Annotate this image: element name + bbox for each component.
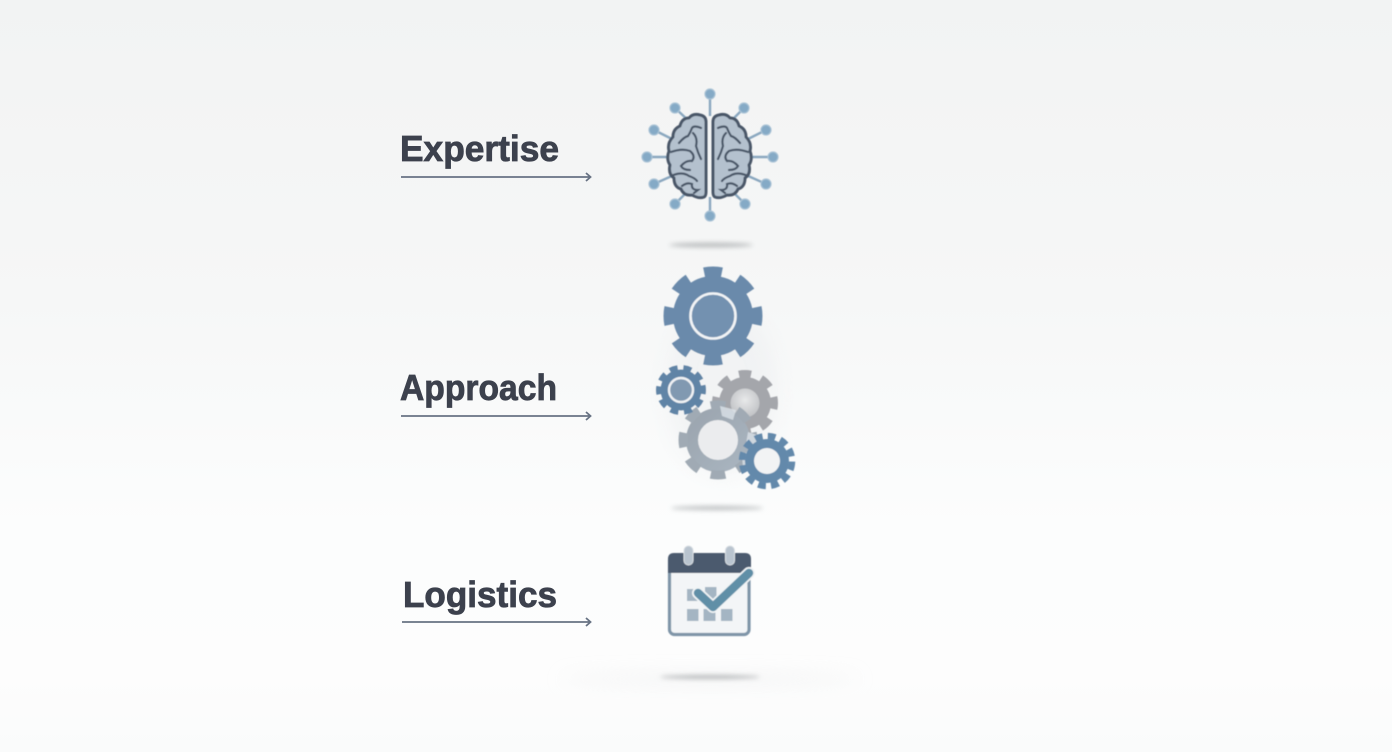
small blue gear left (659, 368, 703, 412)
grey gear upper right (716, 374, 774, 432)
calendar body (670, 555, 749, 634)
soft glow behind gears (667, 305, 777, 475)
shadow: gears (671, 506, 763, 510)
heading: Approach: Approach (400, 367, 557, 408)
shadow: calendar (560, 674, 860, 684)
calendar rings (684, 546, 734, 565)
check mark (698, 573, 749, 607)
icon: brain with network nodes (642, 89, 778, 221)
network nodes (642, 89, 778, 221)
small blue gear right (737, 431, 797, 491)
right hemisphere (713, 114, 751, 198)
shadow: brain (669, 243, 753, 247)
calendar date squares (687, 587, 732, 621)
icon: calendar with check mark (668, 546, 751, 634)
heading: Expertise: Expertise (400, 128, 559, 169)
translucent gear overlaps (720, 406, 760, 468)
large blue gear (669, 272, 757, 360)
left hemisphere (668, 114, 706, 198)
arrow: Logistics (402, 618, 590, 626)
arrow: Approach (401, 412, 590, 420)
calendar header (668, 553, 751, 573)
icon: gear cluster (659, 272, 797, 491)
grey gear centre (683, 405, 753, 475)
arrow: Expertise (401, 173, 590, 181)
heading: Logistics: Logistics (403, 574, 557, 615)
network connectors (647, 94, 773, 216)
